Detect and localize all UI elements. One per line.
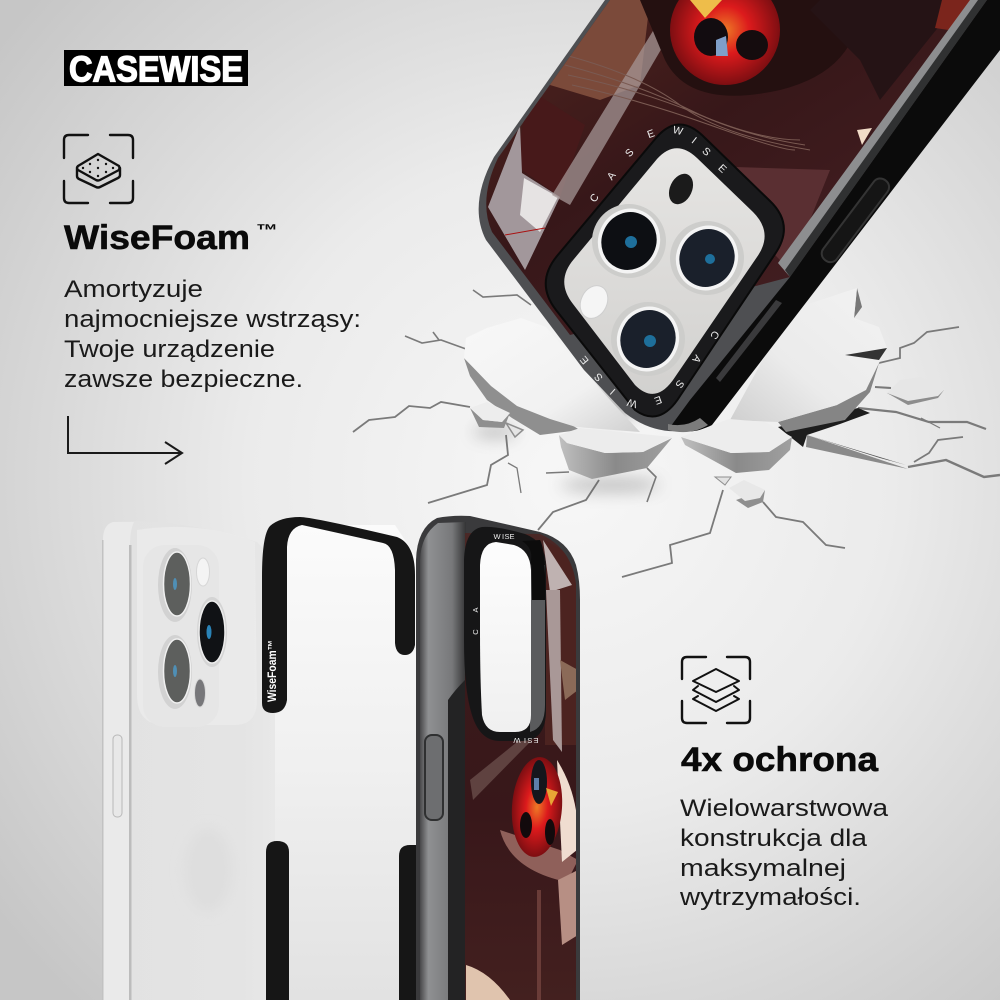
- text block: protection description: Wielowarstwowa: [680, 795, 889, 822]
- eye socket: [640, 0, 860, 96]
- camera ring: [464, 527, 546, 745]
- white phone back: [102, 521, 275, 1000]
- WiseFoam label: WiseFoam™: [267, 640, 279, 702]
- camera plate: [564, 148, 765, 394]
- heading: 4x ochrona: 4x ochrona: [681, 741, 879, 779]
- ring lettering: W: [513, 736, 521, 745]
- text block: protection description: konstrukcja dla: [680, 825, 868, 852]
- ring lettering: S: [504, 532, 510, 541]
- cracked plate: right pebble: [887, 377, 944, 405]
- side button: [819, 175, 892, 265]
- eyelash lines: [565, 55, 810, 150]
- ring lettering: E: [578, 353, 592, 366]
- artwork: [465, 530, 580, 1000]
- side button: [113, 735, 122, 817]
- phone body and bumper: [479, 0, 1000, 431]
- ring lettering: S: [527, 736, 533, 745]
- icon: layers in frame: [682, 657, 750, 723]
- lens 3: [609, 299, 687, 379]
- ring lettering: E: [653, 393, 663, 407]
- arrow: [68, 416, 182, 464]
- flash: [575, 281, 613, 323]
- ring lettering: S: [623, 146, 637, 160]
- artwork: [486, 0, 970, 335]
- side wall: [420, 522, 466, 1000]
- text block: WiseFoam description: Amortyzuje: [64, 276, 203, 303]
- red iris: [670, 0, 780, 85]
- lens 1: [590, 201, 668, 281]
- ring lettering: C: [471, 629, 480, 635]
- lens 2: [197, 597, 227, 667]
- lens 3: [158, 635, 192, 709]
- ring lettering: [578, 124, 729, 410]
- cracked plate: small left: [470, 402, 523, 437]
- soft shadows around impact: [473, 363, 830, 492]
- ring lettering: S: [699, 145, 713, 159]
- ring lettering: W: [493, 532, 501, 541]
- text block: protection description: wytrzymałości.: [679, 884, 861, 911]
- grey highlights: [488, 125, 560, 270]
- white phone side band: [103, 522, 134, 1000]
- lens 2: [668, 218, 746, 298]
- text block: WiseFoam description: Twoje urządzenie: [64, 336, 275, 363]
- eyelid: [500, 830, 578, 882]
- red iris: [512, 757, 562, 857]
- glossy strip: [778, 0, 987, 277]
- ring lettering: E: [533, 736, 539, 745]
- ring lettering: E: [646, 127, 656, 141]
- ring lettering: W: [626, 396, 639, 410]
- lash streaks: [470, 738, 530, 800]
- lens 1: [158, 548, 192, 622]
- heading: WiseFoam: ™: [256, 221, 278, 240]
- cheek highlight: [558, 871, 576, 945]
- camera plateau: [137, 527, 257, 725]
- cracked plate: upper right: [730, 288, 887, 432]
- sensor: [664, 170, 698, 208]
- button: [425, 735, 443, 820]
- text block: protection description: [679, 795, 889, 911]
- foam strip: lower left: [266, 841, 289, 1000]
- ring lettering: S: [592, 370, 606, 384]
- ring lettering: C: [707, 328, 722, 342]
- icon: foam pad in frame: [64, 135, 133, 203]
- ring lettering: [471, 532, 539, 745]
- dark case, side view: [416, 516, 580, 1000]
- logo: CASEWISE: CASEWISE: [69, 48, 243, 90]
- crack hole and wedge, right: [778, 408, 908, 469]
- camera ring: [546, 124, 784, 416]
- foam strip: lower right: [399, 845, 418, 1000]
- wall cracks: [353, 290, 1000, 577]
- eye white: [557, 760, 578, 862]
- ring lettering: W: [671, 124, 684, 138]
- flash and sensor: [194, 558, 210, 707]
- cracked plate: bottom pebbles: [715, 477, 765, 508]
- black side wall: [668, 0, 1000, 432]
- ring lettering: I: [524, 736, 526, 745]
- cracked plate: bottom left: [559, 428, 672, 479]
- text block: WiseFoam description: zawsze bezpieczne.: [64, 366, 303, 393]
- ring lettering: A: [471, 607, 480, 613]
- cracked plate: bottom right: [681, 419, 792, 473]
- heading: WiseFoam: WiseFoam: [64, 219, 250, 257]
- highlights right: [935, 0, 970, 30]
- foam insert: clear area: [275, 525, 418, 1000]
- dark notch: [845, 348, 887, 360]
- ring lettering: S: [673, 377, 686, 390]
- foam strip: top: [262, 517, 415, 713]
- ring lettering: E: [715, 162, 729, 176]
- top phone tilted into the wall: [470, 0, 1000, 432]
- text block: WiseFoam description: najmocniejsze wstrząsy:: [64, 306, 361, 333]
- text block: WiseFoam description: [64, 276, 361, 393]
- ring lettering: A: [690, 352, 703, 365]
- ring lettering: I: [502, 532, 504, 541]
- apple logo ghost: [184, 828, 232, 912]
- cracked plate: upper left: [464, 318, 640, 435]
- ring lettering: C: [588, 191, 602, 205]
- ring lettering: E: [509, 532, 515, 541]
- ring lettering: I: [689, 135, 699, 146]
- ring lettering: I: [608, 386, 618, 397]
- ring lettering: A: [605, 170, 619, 183]
- text block: protection description: maksymalnej: [680, 855, 846, 882]
